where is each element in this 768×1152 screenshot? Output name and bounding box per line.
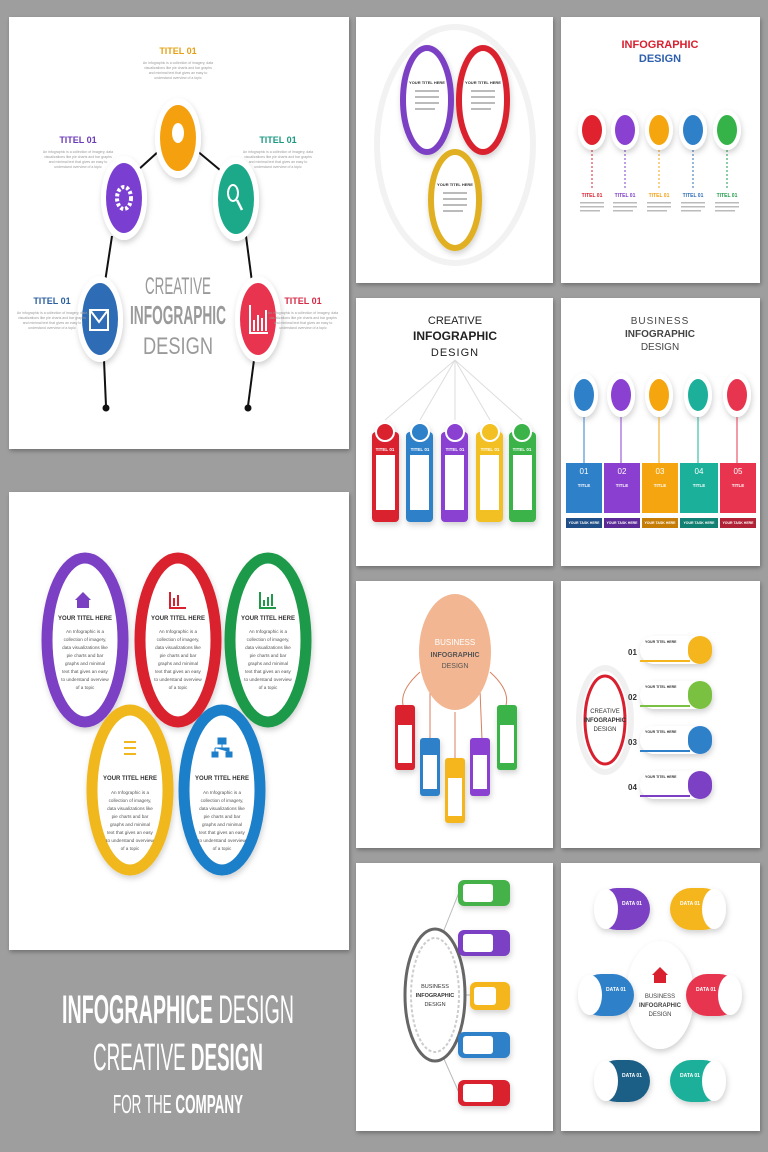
panel: five ring infographic: of a topic xyxy=(76,685,95,690)
panel: business infographic numbered: 03 xyxy=(656,467,665,476)
panel: five ring infographic: pie charts and bar xyxy=(204,814,241,819)
panel: business infographic numbered: YOUR TASK HERE xyxy=(722,521,754,525)
panel: infographic design five circles: DESIGN xyxy=(639,53,681,65)
panel: creative infographic arc: and minimal text that gives an easy to xyxy=(274,321,332,325)
panel: infographic design five circles: TITEL 01 xyxy=(615,193,636,199)
panel: creative ring with four bars: 03 xyxy=(628,738,637,747)
panel: five ring infographic: text that gives an easy xyxy=(107,830,154,835)
panel: creative infographic arc: and minimal text that gives an easy to xyxy=(49,160,107,164)
panel: five ring infographic: pie charts and bar xyxy=(160,653,197,658)
panel: business peach hub: DESIGN xyxy=(442,663,468,670)
panel: creative ring with four bars: INFOGRAPHIC xyxy=(584,718,627,724)
panel: creative infographic arc: An infographic is a collection of imagery, data xyxy=(143,61,213,65)
panel: five ring infographic: pie charts and bar xyxy=(112,814,149,819)
icon: orange bulb circle xyxy=(155,98,201,178)
panel: creative infographic cards: TITEL 01 xyxy=(411,447,430,452)
heading: creative infographic design: INFOGRAPHIC xyxy=(130,300,226,330)
panel: business infographic numbered: YOUR TASK HERE xyxy=(644,521,676,525)
icon: red chart circle xyxy=(235,276,281,362)
panel: creative ring with four bars: 02 xyxy=(628,693,637,702)
panel: five ring infographic: to understand overview xyxy=(61,677,109,682)
panel: business infographic numbered xyxy=(561,298,760,566)
panel: three rings: YOUR TITEL HERE xyxy=(409,80,445,85)
panel: infographic design five circles: TITEL 01 xyxy=(683,193,704,199)
icon: purple gear circle xyxy=(101,156,147,240)
panel: infographic design five circles xyxy=(561,17,760,283)
panel: creative infographic cards: TITEL 01 xyxy=(446,447,465,452)
panel: creative ring with four bars: 04 xyxy=(628,783,637,792)
panel: business infographic numbered: BUSINESS xyxy=(631,316,689,327)
heading: creative infographic design xyxy=(130,273,226,360)
icon: blue mail circle xyxy=(77,276,123,362)
panel: five ring infographic: graphs and minimal xyxy=(65,661,105,666)
panel: creative infographic arc: visualizations like pie charts and bar graphs xyxy=(44,155,112,159)
panel: business infographic numbered: TITLE xyxy=(693,483,705,488)
icon: bar chart xyxy=(260,592,276,608)
title: bottom tagline xyxy=(62,988,294,1119)
icon: house xyxy=(75,592,91,608)
panel: business peach hub: BUSINESS xyxy=(435,638,475,647)
icon: chart magnifier xyxy=(170,592,186,608)
panel: five ring infographic: collection of imagery, xyxy=(109,798,151,803)
panel: business infographic numbered: TITLE xyxy=(654,483,666,488)
panel: creative infographic cards: TITEL 01 xyxy=(481,447,500,452)
panel: business infographic numbered: INFOGRAPHIC xyxy=(625,329,695,340)
panel: creative infographic arc: understand overview of a topic xyxy=(28,326,76,330)
panel: creative infographic arc: An infographic is a collection of imagery, data xyxy=(268,311,338,315)
panel: infographic design five circles: TITEL 01 xyxy=(649,193,670,199)
panel: creative ring with four bars: YOUR TITEL HERE xyxy=(645,640,677,644)
panel: creative infographic arc: and minimal text that gives an easy to xyxy=(249,160,307,164)
panel: creative infographic cards: INFOGRAPHIC xyxy=(413,329,497,343)
panel: creative ring with four bars: YOUR TITEL HERE xyxy=(645,730,677,734)
panel: data hub six pills: DATA 01 xyxy=(622,1073,642,1079)
panel: five ring infographic: An Infographic is a xyxy=(66,629,104,634)
panel: data hub six pills xyxy=(561,863,760,1131)
panel: business infographic numbered: DESIGN xyxy=(641,342,679,353)
panel: five ring infographic: graphs and minimal xyxy=(158,661,198,666)
panel: five ring infographic: text that gives an easy xyxy=(199,830,246,835)
panel: five ring infographic: of a topic xyxy=(213,846,232,851)
text: titles xyxy=(33,46,322,306)
title: bottom tagline: FOR THE COMPANY xyxy=(113,1089,243,1119)
panel: creative infographic arc: visualizations like pie charts and bar graphs xyxy=(18,316,86,320)
panel: creative infographic arc: understand overview of a topic xyxy=(279,326,327,330)
panel: creative infographic cards xyxy=(356,298,553,566)
text: titles: TITEL 01 xyxy=(33,296,71,306)
panel: data hub six pills: INFOGRAPHIC xyxy=(639,1003,682,1009)
panel: creative infographic cards: DESIGN xyxy=(431,347,479,359)
panel: five ring infographic: An Infographic is a xyxy=(249,629,287,634)
panel: creative infographic arc: and minimal text that gives an easy to xyxy=(23,321,81,325)
panel: three rings xyxy=(356,17,553,283)
panel: business ring with five tabs: INFOGRAPHIC xyxy=(416,993,454,999)
panel: business infographic numbered: TITLE xyxy=(732,483,744,488)
panel: creative ring with four bars: YOUR TITEL HERE xyxy=(645,685,677,689)
heading: creative infographic design: CREATIVE xyxy=(145,273,211,300)
panel: creative ring with four bars: YOUR TITEL HERE xyxy=(645,775,677,779)
panel: creative infographic arc: visualizations like pie charts and bar graphs xyxy=(269,316,337,320)
panel: five ring infographic: of a topic xyxy=(169,685,188,690)
panel: creative infographic cards: TITEL 01 xyxy=(513,447,532,452)
panel: five ring infographic: An Infographic is a xyxy=(203,790,241,795)
panel: five ring infographic: graphs and minimal xyxy=(202,822,242,827)
panel: five ring infographic: pie charts and bar xyxy=(67,653,104,658)
text: titles: TITEL 01 xyxy=(159,46,197,56)
panel: five ring infographic: collection of imagery, xyxy=(157,637,199,642)
panel: five ring infographic: collection of imagery, xyxy=(64,637,106,642)
panel: five ring infographic: text that gives an easy xyxy=(155,669,202,674)
panel: infographic design five circles: TITEL 01 xyxy=(717,193,738,199)
panel: business ring with five tabs xyxy=(356,863,553,1131)
panel: data hub six pills: DESIGN xyxy=(648,1012,672,1018)
panel: five ring infographic: An Infographic is a xyxy=(111,790,149,795)
panel: creative infographic arc: understand overview of a topic xyxy=(254,165,302,169)
panel: creative infographic arc: An infographic is a collection of imagery, data xyxy=(243,150,313,154)
panel: creative infographic arc: and minimal text that gives an easy to xyxy=(149,71,207,75)
panel: five ring infographic: data visualizations like xyxy=(199,806,245,811)
panel: five ring infographic: YOUR TITEL HERE xyxy=(241,616,295,622)
panel: five ring infographic: graphs and minimal xyxy=(110,822,150,827)
panel: five ring infographic: text that gives an easy xyxy=(62,669,109,674)
panel: business infographic numbered: 01 xyxy=(580,467,589,476)
panel: creative infographic cards: CREATIVE xyxy=(428,315,482,327)
panel: five ring infographic: data visualizations like xyxy=(155,645,201,650)
title: bottom tagline: INFOGRAPHICE DESIGN xyxy=(62,988,294,1032)
panel: business infographic numbered: YOUR TASK HERE xyxy=(568,521,600,525)
panel: data hub six pills: DATA 01 xyxy=(696,987,716,993)
title: bottom tagline: CREATIVE DESIGN xyxy=(93,1037,263,1079)
panel: data hub six pills: DATA 01 xyxy=(622,901,642,907)
panel: five ring infographic: YOUR TITEL HERE xyxy=(58,616,112,622)
panel: business infographic numbered: TITLE xyxy=(616,483,628,488)
panel: five ring infographic: YOUR TITEL HERE xyxy=(151,616,205,622)
panel: business ring with five tabs: BUSINESS xyxy=(421,984,449,990)
panel: five ring infographic: collection of imagery, xyxy=(201,798,243,803)
panel: five ring infographic: to understand overview xyxy=(154,677,202,682)
panel: five ring infographic: data visualizations like xyxy=(245,645,291,650)
panel: five ring infographic: to understand overview xyxy=(106,838,154,843)
panel: business peach hub xyxy=(356,581,553,848)
panel: business peach hub: INFOGRAPHIC xyxy=(430,652,480,659)
panel: five ring infographic: to understand overview xyxy=(198,838,246,843)
text: titles: TITEL 01 xyxy=(284,296,322,306)
panel: five ring infographic: YOUR TITEL HERE xyxy=(103,776,157,782)
panel: five ring infographic: data visualizations like xyxy=(107,806,153,811)
panel: creative infographic arc: visualizations like pie charts and bar graphs xyxy=(244,155,312,159)
panel: five ring infographic: pie charts and bar xyxy=(250,653,287,658)
panel: business infographic numbered: YOUR TASK HERE xyxy=(606,521,638,525)
panel: five ring infographic: data visualizations like xyxy=(62,645,108,650)
panel: five ring infographic: of a topic xyxy=(259,685,278,690)
panel: data hub six pills: BUSINESS xyxy=(645,994,675,1000)
panel: creative infographic cards: TITEL 01 xyxy=(376,447,395,452)
panel: creative infographic arc: An infographic is a collection of imagery, data xyxy=(43,150,113,154)
panel: creative ring with four bars: 01 xyxy=(628,648,637,657)
panel: creative ring with four bars: DESIGN xyxy=(593,727,617,733)
panel: business ring with five tabs: DESIGN xyxy=(424,1002,446,1008)
text: titles: TITEL 01 xyxy=(259,135,297,145)
panel: creative infographic arc: understand overview of a topic xyxy=(154,76,202,80)
panel: creative infographic arc: An infographic is a collection of imagery, data xyxy=(17,311,87,315)
panel: infographic design five circles: INFOGRAPHIC xyxy=(622,39,699,51)
panel: creative infographic arc xyxy=(9,17,349,449)
panel: creative ring with four bars xyxy=(561,581,760,848)
panel: five ring infographic: to understand overview xyxy=(244,677,292,682)
icon: teal search circle xyxy=(213,157,259,241)
icon: sliders xyxy=(124,742,136,754)
heading: creative infographic design: DESIGN xyxy=(143,333,213,360)
panel: data hub six pills: DATA 01 xyxy=(606,987,626,993)
panel: three rings: YOUR TITEL HERE xyxy=(437,182,473,187)
icon: hierarchy xyxy=(212,738,232,757)
panel: five ring infographic: YOUR TITEL HERE xyxy=(195,776,249,782)
panel: business infographic numbered: 05 xyxy=(734,467,743,476)
panel: business infographic numbered: 02 xyxy=(618,467,627,476)
panel: five ring infographic xyxy=(9,492,349,950)
panel: business infographic numbered: YOUR TASK HERE xyxy=(683,521,715,525)
panel: creative infographic arc: visualizations like pie charts and bar graphs xyxy=(144,66,212,70)
panel: data hub six pills: DATA 01 xyxy=(680,901,700,907)
panel: business infographic numbered: TITLE xyxy=(578,483,590,488)
panel: infographic design five circles: TITEL 01 xyxy=(582,193,603,199)
panel: business infographic numbered: 04 xyxy=(695,467,704,476)
panel: five ring infographic: of a topic xyxy=(121,846,140,851)
text: titles: TITEL 01 xyxy=(59,135,97,145)
panel: five ring infographic: graphs and minimal xyxy=(248,661,288,666)
panel: five ring infographic: text that gives an easy xyxy=(245,669,292,674)
panel: three rings: YOUR TITEL HERE xyxy=(465,80,501,85)
panel: creative ring with four bars: CREATIVE xyxy=(590,709,620,715)
panel: five ring infographic: An Infographic is a xyxy=(159,629,197,634)
panel: data hub six pills: DATA 01 xyxy=(680,1073,700,1079)
panel: five ring infographic: collection of imagery, xyxy=(247,637,289,642)
panel: creative infographic arc: understand overview of a topic xyxy=(54,165,102,169)
